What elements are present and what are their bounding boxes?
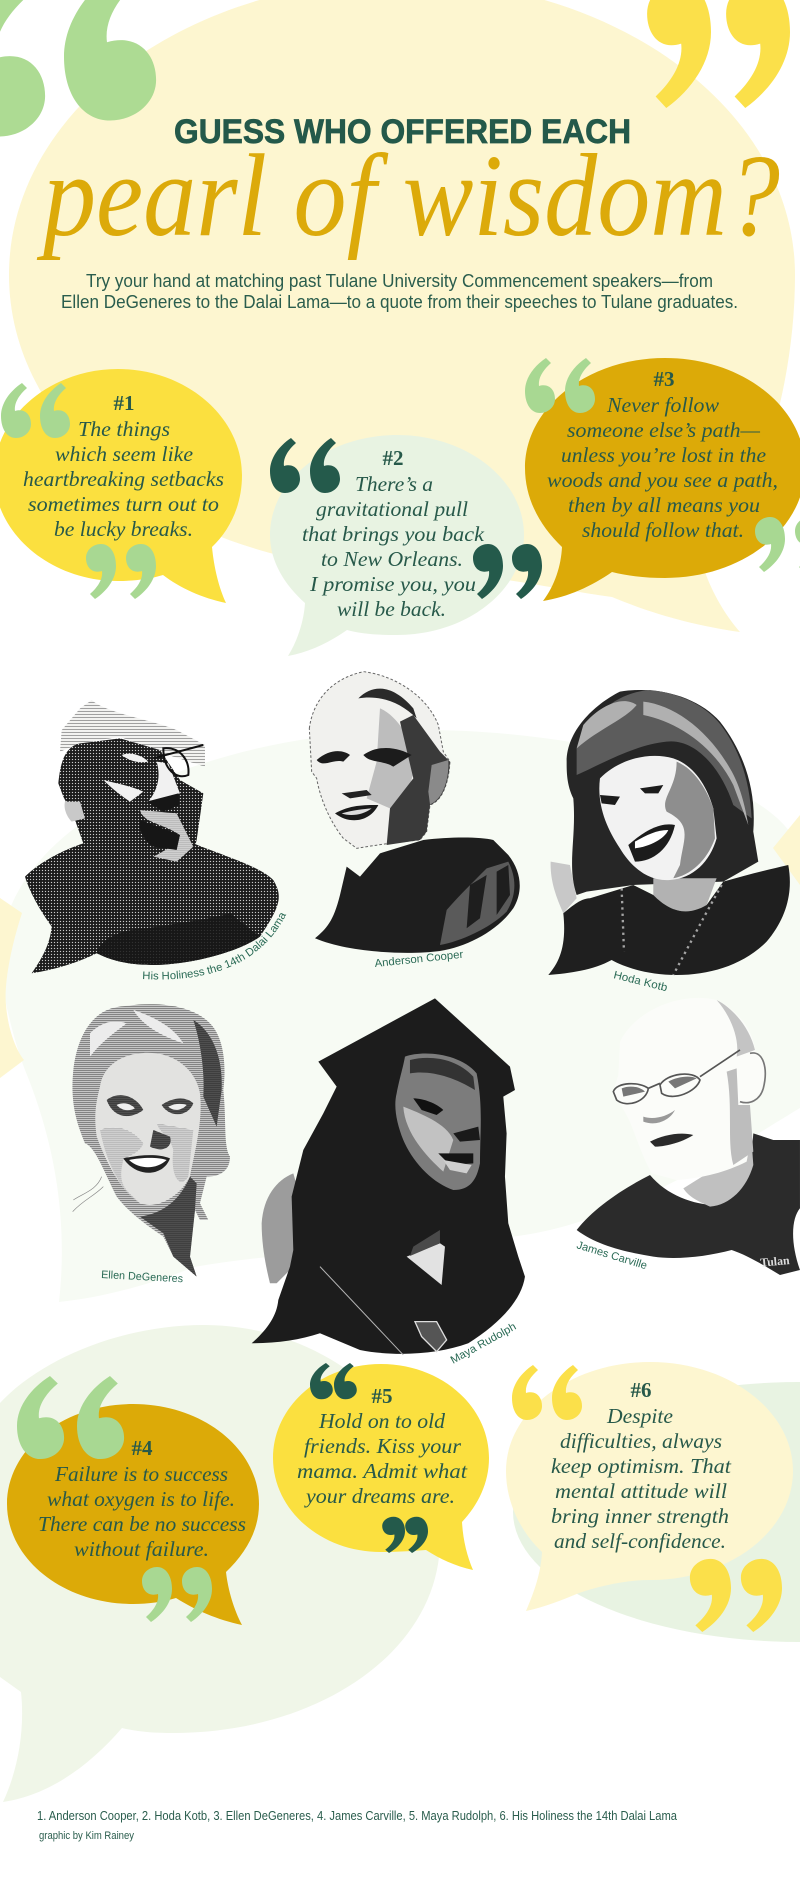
- background bubble: large cream: [9, 0, 795, 632]
- quote marks 6: [512, 1365, 782, 1632]
- ear: [740, 1053, 765, 1103]
- hair highlights: [577, 701, 748, 825]
- quote marks 4: [17, 1376, 212, 1622]
- caption: Maya Rudolph: Maya Rudolph: [449, 1321, 518, 1367]
- mouth: [650, 1134, 693, 1147]
- quote text 3: [547, 367, 778, 542]
- quote text 2: to New Orleans.: [321, 547, 463, 571]
- ear: [65, 802, 85, 822]
- hair: [60, 700, 205, 767]
- teeth: [129, 1158, 167, 1167]
- quote text 4: Failure is to success: [54, 1462, 228, 1486]
- background bubble: pale green bottom left: [0, 1325, 440, 1802]
- quote marks 3: [525, 358, 800, 572]
- eye shadow: [622, 1077, 697, 1097]
- caption text: Dalai Lama: His Holiness the 14th Dalai Lama: [143, 913, 286, 980]
- face: [395, 1054, 481, 1190]
- quote text 2: I promise you, you: [309, 572, 476, 596]
- background bubble: pale green middle: [0, 730, 800, 1302]
- shirt logo: Tulan: [760, 1253, 790, 1270]
- face: [58, 738, 203, 870]
- nose: [342, 790, 372, 798]
- lip highlight: [342, 808, 372, 815]
- neck: [653, 878, 717, 911]
- side shading: [727, 1068, 753, 1165]
- mouth: [628, 824, 675, 862]
- bubble shape 5: [273, 1364, 489, 1570]
- eye: [413, 1098, 443, 1115]
- quote bubble 2: [270, 435, 542, 656]
- quote text 6: Despite: [606, 1404, 673, 1428]
- caption path: Dalai Lama: [142, 915, 286, 979]
- forehead shadow: [410, 1058, 475, 1090]
- intro text: [61, 271, 738, 312]
- face: [599, 756, 717, 880]
- portrait: Anderson Cooper: [309, 672, 520, 953]
- answers footer: 1. Anderson Cooper, 2. Hoda Kotb, 3. Ellen DeGeneres, 4. James Carville, 5. Maya Rudolph, 6. His Holiness the 14th Dalai Lama: [37, 1808, 678, 1823]
- quote text 3: #3: [654, 367, 674, 391]
- quote text 6: bring inner strength: [551, 1504, 729, 1528]
- quote text 6: and self-confidence.: [554, 1529, 726, 1553]
- portrait: Dalai Lama: [25, 700, 279, 973]
- shield emblem: [415, 1322, 447, 1352]
- intro text: Ellen DeGeneres to the Dalai Lama—to a quote from their speeches to Tulane graduates.: [61, 292, 738, 312]
- lower face highlight: [140, 810, 193, 862]
- jacket: [315, 837, 520, 953]
- hair swoosh: [358, 689, 417, 718]
- collar strands: [73, 1177, 103, 1212]
- background bubble: pale green bottom right: [513, 1382, 800, 1642]
- nose shadow: [150, 1130, 171, 1149]
- necklace: [622, 885, 722, 975]
- quote bubble 6: [506, 1362, 793, 1632]
- head: [613, 998, 767, 1180]
- quote text 2: There’s a: [355, 472, 433, 496]
- bubble shape 4: [7, 1404, 259, 1625]
- quote text 3: woods and you see a path,: [547, 468, 778, 492]
- portrait: Ellen DeGeneres: [72, 1004, 230, 1277]
- quote text 2: will be back.: [337, 597, 446, 621]
- quote text 4: without failure.: [74, 1537, 209, 1561]
- quote mark: large green opening: [0, 0, 156, 136]
- quote text 5: mama. Admit what: [297, 1459, 468, 1483]
- caption: Anderson Cooper: Anderson Cooper: [374, 949, 464, 970]
- bubble shape 2: [270, 435, 524, 656]
- robe: [25, 843, 279, 973]
- quote text 3: someone else’s path—: [567, 418, 760, 442]
- quote text 5: friends. Kiss your: [304, 1434, 462, 1458]
- face tones: [100, 1123, 193, 1203]
- quote text 1: The things: [78, 417, 170, 441]
- eyes: [600, 785, 663, 805]
- mouth: [438, 1153, 473, 1165]
- nose: [453, 1127, 480, 1142]
- robe shadow: [97, 913, 260, 965]
- quote text 2: gravitational pull: [316, 497, 468, 521]
- quote text 1: which seem like: [55, 442, 193, 466]
- lip: [443, 1160, 472, 1173]
- glasses: [613, 1050, 740, 1104]
- quote text 6: mental attitude will: [555, 1479, 727, 1503]
- hair: [567, 690, 758, 895]
- quote text 1: be lucky breaks.: [54, 517, 193, 541]
- quote text 6: keep optimism. That: [551, 1454, 732, 1478]
- jaw shadow: [140, 1177, 197, 1277]
- quote marks 5: [310, 1363, 428, 1553]
- quote text 6: #6: [630, 1378, 652, 1402]
- quote text 5: [297, 1384, 468, 1508]
- gown folds: [467, 865, 510, 928]
- eye whites: [117, 1103, 187, 1110]
- quote bubble 3: [525, 358, 800, 601]
- quote text 4: [38, 1436, 246, 1561]
- portrait: Hoda Kotb: [548, 690, 790, 975]
- eye sockets: [107, 1095, 193, 1116]
- quote text 1: heartbreaking setbacks: [23, 467, 224, 491]
- intro text: Try your hand at matching past Tulane University Commencement speakers—from: [86, 271, 713, 291]
- portrait: James Carville: [577, 998, 800, 1275]
- highlights: [103, 754, 180, 802]
- quote bubble 1: [0, 369, 242, 603]
- bubble shape 3: [525, 358, 800, 601]
- nose: [643, 1110, 675, 1123]
- face shadow: [387, 715, 450, 845]
- quote bubble 5: [273, 1363, 489, 1570]
- caption: Hoda Kotb: Hoda Kotb: [612, 969, 669, 994]
- caption: Ellen DeGeneres: Ellen DeGeneres: [101, 1269, 184, 1285]
- hair shadow: [193, 1020, 222, 1127]
- glasses: [153, 745, 203, 776]
- nose and mouth: [140, 793, 180, 850]
- cap, hair and gown: [252, 998, 525, 1354]
- scalp shading: [717, 1000, 755, 1057]
- collar: [407, 1243, 445, 1285]
- quote text 3: then by all means you: [568, 493, 760, 517]
- cheek highlight: [403, 1107, 453, 1172]
- quote text 4: what oxygen is to life.: [47, 1487, 235, 1511]
- quote text 6: [551, 1378, 732, 1553]
- quote marks 2: [270, 438, 542, 599]
- caption: James Carville: James Carville: [575, 1239, 648, 1272]
- gown stripe: [440, 862, 514, 945]
- title: guess who offered each: GUESS WHO OFFERED EACH: [174, 113, 631, 151]
- quote marks 1: [1, 383, 156, 599]
- quote text 3: Never follow: [606, 393, 719, 417]
- face: [95, 1053, 201, 1205]
- quote text 2: that brings you back: [302, 522, 485, 546]
- background bubble: cream right edge: [773, 815, 800, 885]
- quote bubble 4: [7, 1376, 259, 1625]
- face grey: [367, 708, 417, 808]
- gown stripe: [320, 1267, 403, 1355]
- bubble shape 1: [0, 369, 242, 603]
- quote text 5: #5: [372, 1384, 392, 1408]
- quote text 2: #2: [382, 446, 404, 470]
- background bubble: cream left tail: [0, 898, 24, 1078]
- teeth: [635, 830, 668, 848]
- ear: [428, 760, 448, 804]
- quote text 5: your dreams are.: [304, 1484, 455, 1508]
- eyes and brows: [317, 748, 412, 767]
- shirt: [577, 1133, 800, 1275]
- quote text 1: sometimes turn out to: [28, 492, 219, 516]
- quote text 4: There can be no success: [38, 1512, 246, 1536]
- quote text 1: #1: [114, 391, 134, 415]
- quote text 3: unless you’re lost in the: [561, 443, 766, 467]
- portrait: Maya Rudolph: [252, 998, 525, 1355]
- grey panel: [551, 862, 577, 913]
- neck: [683, 1142, 753, 1207]
- neck: [410, 1230, 440, 1256]
- head: [309, 672, 450, 848]
- quote text 6: difficulties, always: [560, 1429, 722, 1453]
- quote text 2: [302, 446, 485, 621]
- quote text 4: #4: [132, 1436, 153, 1460]
- graphic credit: graphic by Kim Rainey: [39, 1830, 134, 1842]
- hair and head: [72, 1004, 230, 1277]
- hair highlight: [90, 1010, 183, 1057]
- quote text 1: [23, 391, 224, 541]
- bubble shape 6: [506, 1362, 793, 1611]
- mouth: [123, 1155, 170, 1173]
- grey background: [262, 1173, 300, 1283]
- quote mark: large yellow closing: [647, 0, 790, 108]
- face shade: [665, 762, 715, 878]
- quote text 5: Hold on to old: [318, 1409, 446, 1433]
- mouth: [335, 805, 378, 820]
- hair crown tone: [577, 690, 752, 818]
- quote text 3: should follow that.: [582, 518, 744, 542]
- dress: [548, 865, 790, 975]
